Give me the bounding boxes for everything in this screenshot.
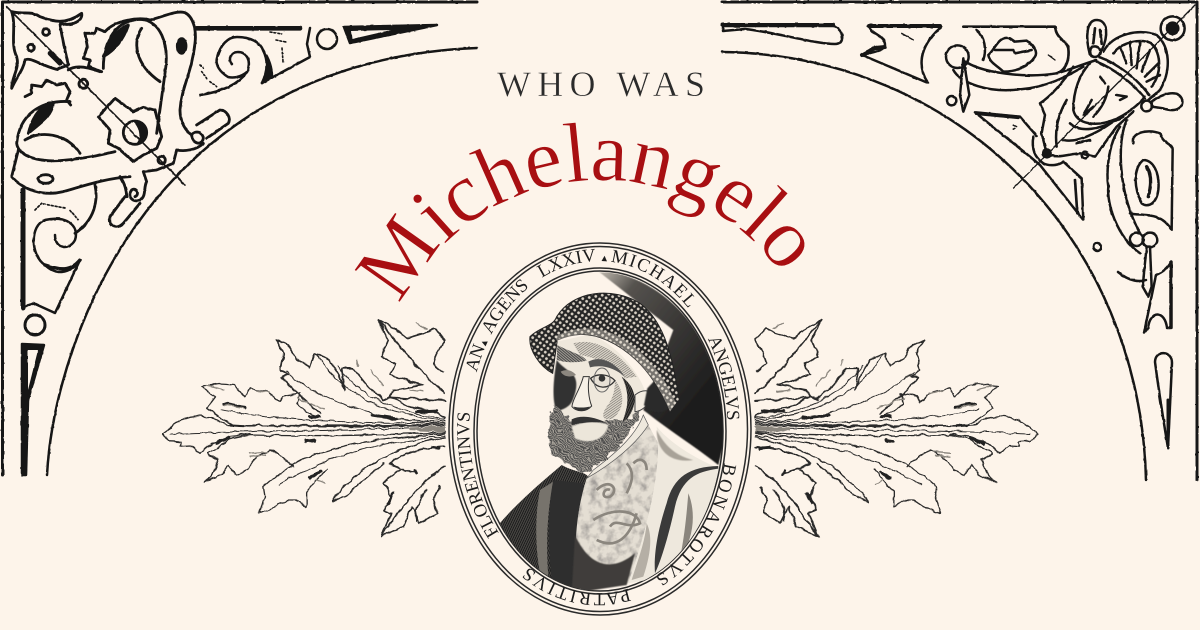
hat [530,293,679,412]
heading: Michelangelo on arc: Michelangelo [354,122,804,302]
portrait medallion [448,242,752,616]
right top bar pieces [723,25,940,83]
right border lines [722,2,1197,480]
left border lines [2,2,477,475]
beard [549,405,642,472]
left arch curve [47,48,477,475]
right lower bracket [1118,262,1172,448]
right cloak [628,427,718,583]
right corner mask ornament [902,5,1195,297]
heading: WHO WAS: WHO WAS [497,64,705,104]
neck collar [587,415,648,478]
face [557,335,645,427]
medallion rings [449,243,751,615]
right corner ornamental frame [722,2,1197,480]
left corner mechanism ornament [7,7,300,233]
acanthus leaves: right [755,320,1038,537]
left corner ornamental frame [2,2,477,475]
lips motif [988,38,1036,72]
left top bar pieces and scroll [200,25,437,95]
face [1073,63,1145,124]
embroidered vest [576,425,658,590]
hat shadow [597,270,727,465]
headdress fan [1103,32,1168,100]
acanthus leaves: left [162,320,445,537]
engraved portrait [498,270,727,593]
right arch curve [722,52,1146,480]
left lower scroll and spikes [22,190,80,475]
medallion inscription: FLORENTINVS AN▴AGENSLXXIV ▴MICHAEL ANGELVS BONAROTVSPATRITIVS [457,248,740,606]
left mantle [498,465,588,593]
